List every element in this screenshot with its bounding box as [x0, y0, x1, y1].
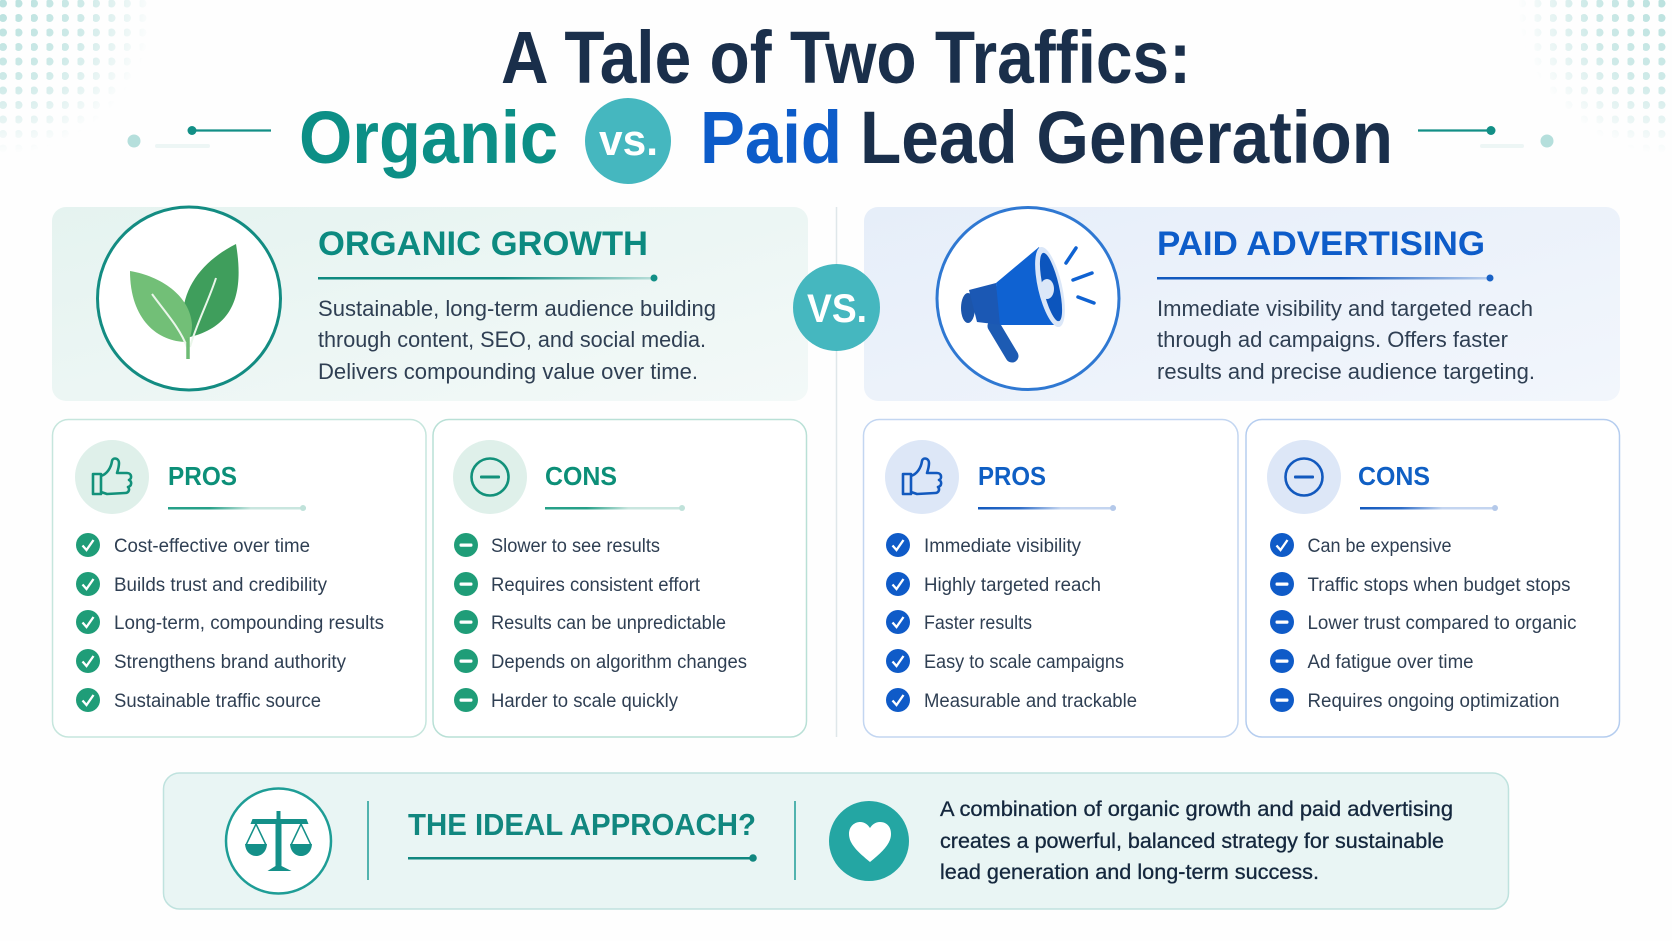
cons list: Lower trust compared to organic [1308, 613, 1576, 634]
heading: paid advertising: PAID ADVERTISING [1157, 225, 1485, 263]
card: organic cons [433, 420, 806, 737]
heading: organic growth: ORGANIC GROWTH [318, 225, 648, 263]
cons list [1270, 533, 1576, 712]
title ornament right [1418, 126, 1554, 148]
approach description: creates a powerful, balanced strategy for sustainable [940, 829, 1444, 853]
pros list: Long-term, compounding results [114, 613, 384, 634]
panel: paid advertising header [864, 207, 1620, 401]
card: paid cons [1246, 420, 1620, 737]
panel: the ideal approach [164, 773, 1508, 909]
cons heading: CONS [1358, 461, 1430, 491]
title vs badge [585, 98, 671, 184]
card: paid pros [864, 420, 1238, 737]
cons list: Depends on algorithm changes [491, 652, 747, 673]
icon: thumbs up [75, 440, 149, 514]
title word: Organic: Organic [299, 96, 558, 179]
pros underline [978, 505, 1116, 511]
pros list [886, 533, 1137, 712]
central vs badge [793, 264, 880, 351]
heading underline [1157, 274, 1494, 282]
paid description [1157, 296, 1535, 384]
organic description: Delivers compounding value over time. [318, 359, 698, 384]
cons underline [1360, 505, 1498, 511]
decorative dot grid: top left [0, 0, 142, 138]
pros list: Measurable and trackable [924, 691, 1137, 712]
icon: minus circle [1267, 440, 1341, 514]
pros list [76, 533, 384, 712]
icon: leaves [98, 207, 280, 390]
cons list: Results can be unpredictable [491, 613, 726, 634]
approach description: lead generation and long-term success. [940, 860, 1319, 884]
icon: minus circle [453, 440, 527, 514]
cons heading: CONS [545, 461, 617, 491]
cons list: Traffic stops when budget stops [1308, 575, 1570, 596]
pros underline [168, 505, 306, 511]
pros list: Sustainable traffic source [114, 691, 321, 712]
title ornament left [128, 126, 271, 148]
card: organic pros [52, 420, 426, 737]
cons list: Can be expensive [1308, 536, 1452, 557]
cons list: Requires consistent effort [491, 575, 701, 596]
heading: the ideal approach: THE IDEAL APPROACH? [408, 807, 756, 842]
cons list: Slower to see results [491, 536, 660, 557]
icon: heart [829, 801, 909, 881]
pros list: Faster results [924, 613, 1032, 634]
pros heading: PROS [978, 461, 1046, 491]
title vs badge: vs. [599, 116, 658, 165]
pros heading: PROS [168, 461, 237, 491]
title word: Paid: Paid [700, 96, 842, 179]
paid description: results and precise audience targeting. [1157, 359, 1535, 384]
organic description: through content, SEO, and social media. [318, 327, 706, 352]
approach underline [408, 854, 757, 862]
title line 1: A Tale of Two Traffics: [501, 16, 1191, 99]
organic description: Sustainable, long-term audience building [318, 296, 716, 321]
pros list: Cost-effective over time [114, 536, 310, 557]
cons list [454, 533, 747, 712]
organic description [318, 296, 716, 384]
approach description [940, 797, 1453, 884]
paid description: Immediate visibility and targeted reach [1157, 296, 1533, 321]
panel: organic growth header [52, 207, 808, 401]
icon: megaphone [937, 208, 1119, 390]
heading underline [318, 274, 658, 282]
cons underline [545, 505, 685, 511]
pros list: Highly targeted reach [924, 575, 1101, 596]
decorative dot grid: top right [1534, 0, 1666, 138]
pros list: Strengthens brand authority [114, 652, 346, 673]
approach description: A combination of organic growth and paid advertising [940, 797, 1453, 821]
pros list: Immediate visibility [924, 536, 1081, 557]
icon: thumbs up [885, 440, 959, 514]
title words: Lead Generation: Lead Generation [860, 96, 1393, 179]
cons list: Ad fatigue over time [1308, 652, 1474, 673]
cons list: Harder to scale quickly [491, 691, 678, 712]
cons list: Requires ongoing optimization [1308, 691, 1560, 712]
title [299, 16, 1393, 184]
pros list: Easy to scale campaigns [924, 652, 1124, 673]
icon: balance scale [226, 788, 331, 894]
paid description: through ad campaigns. Offers faster [1157, 327, 1508, 352]
pros list: Builds trust and credibility [114, 575, 327, 596]
central vs badge: VS. [807, 287, 867, 331]
